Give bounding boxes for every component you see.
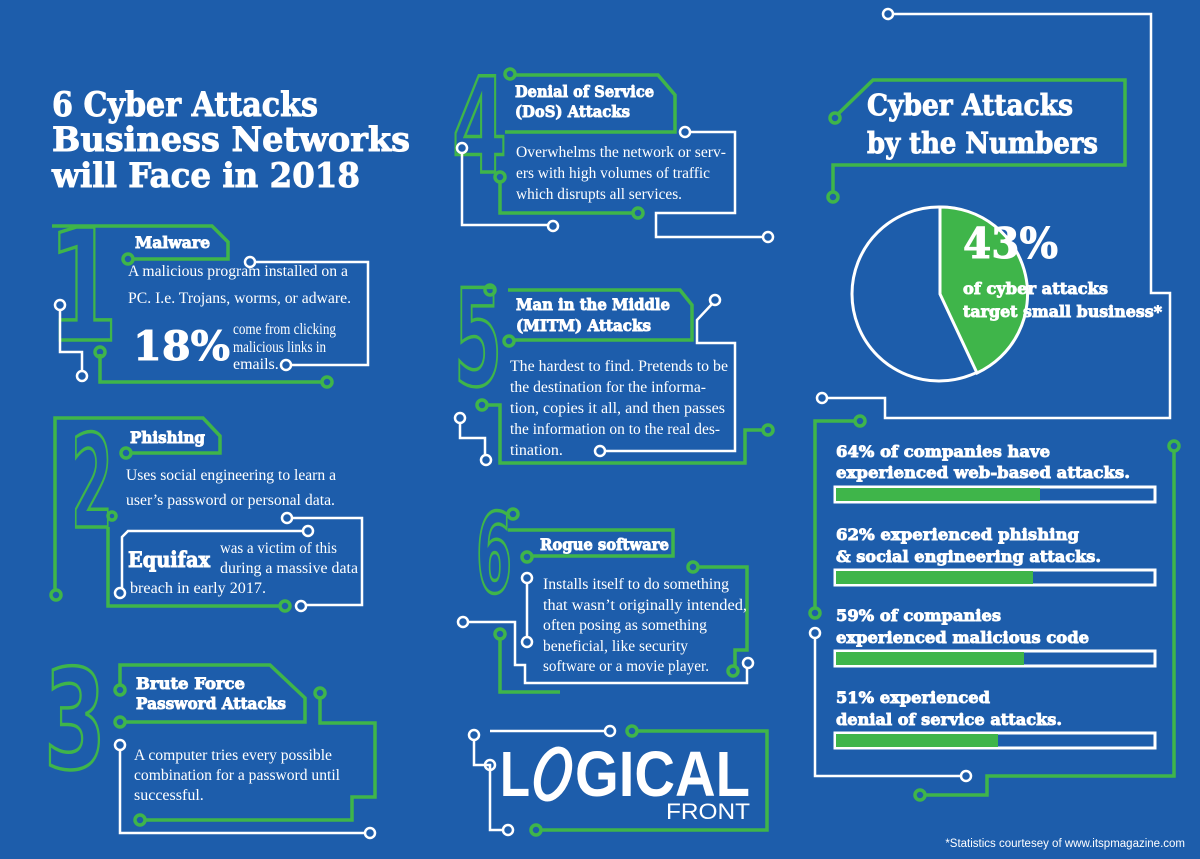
bar 51%: denial of service attacks. <box>836 710 1062 729</box>
title: Business Networks <box>52 120 410 160</box>
bar 62%: & social engineering attacks. <box>836 547 1101 566</box>
panel: 5 MITM <box>454 261 773 465</box>
panel: 1 malware: PC. I.e. Trojans, worms, or adware. <box>128 290 351 307</box>
panel: 5 MITM: the destination for the informa- <box>510 379 706 396</box>
bar 59%: experienced malicious code <box>836 628 1089 647</box>
title <box>51 85 410 196</box>
bar 51%: 51% experienced <box>836 688 990 707</box>
icon: digit 1: 1 <box>48 196 118 377</box>
panel: 2 phishing: during a massive data <box>220 560 358 577</box>
panel: 4 DoS: Denial of Service <box>515 82 654 101</box>
footer: source note: *Statistics courtesey of www.itspmagazine.com <box>945 838 1185 850</box>
panel: 3 brute force: combination for a password until <box>134 767 341 784</box>
panel: 2 phishing <box>51 409 362 611</box>
bar 51% <box>835 688 1155 748</box>
panel: 1 malware: Malware <box>135 233 210 252</box>
panel: cyber attacks by the numbers <box>817 9 1170 418</box>
panel: stats bars <box>810 416 1179 800</box>
panel: 4 DoS <box>452 50 773 242</box>
panel: 5 MITM: Man in the Middle <box>516 295 670 314</box>
heading: by the numbers: Cyber Attacks <box>867 88 1073 122</box>
title: will Face in 2018 <box>51 156 360 196</box>
panel: 2 phishing: user’s password or personal data. <box>126 492 335 509</box>
panel: 2 phishing: Equifax <box>128 547 210 572</box>
panel: 1 malware: malicious links in <box>233 339 326 356</box>
panel: 3 brute force: A computer tries every possible <box>134 747 332 764</box>
panel: 2 phishing: 2 <box>71 409 113 558</box>
bar 64%: experienced web-based attacks. <box>836 463 1130 482</box>
panel: 3 brute force <box>44 640 375 838</box>
panel: 6 rogue software: software or a movie player. <box>543 658 709 675</box>
bar 62% <box>835 525 1155 585</box>
panel: 5 MITM: tination. <box>510 442 563 459</box>
bar 59%: 59% of companies <box>836 606 1001 625</box>
pie chart 43% <box>852 207 1163 381</box>
panel: 4 DoS: (DoS) Attacks <box>515 102 630 121</box>
logo: logical front: L <box>500 738 530 810</box>
panel: 1 malware: emails. <box>233 356 279 373</box>
panel: 6 rogue software: that wasn’t originally intended, <box>543 597 747 614</box>
panel: 4 DoS: ers with high volumes of traffic <box>516 165 710 182</box>
bar 64% <box>835 442 1155 502</box>
panel: 6 rogue software: Rogue software <box>540 535 669 554</box>
panel: 4 DoS: Overwhelms the network or serv- <box>516 144 726 161</box>
panel: 1 malware: come from clicking <box>233 321 336 338</box>
logo: logical front <box>469 726 767 835</box>
panel: 1 malware: A malicious program installed on a <box>128 263 348 280</box>
panel: 6 rogue software: beneficial, like security <box>543 638 688 655</box>
icon: digit 5: 5 <box>454 261 502 417</box>
panel: 4 DoS: which disrupts all services. <box>516 186 682 203</box>
panel: 6 rogue software: often posing as something <box>543 617 707 634</box>
panel: 5 MITM: The hardest to find. Pretends to be <box>510 358 728 375</box>
icon: digit 4: 4 <box>452 50 507 204</box>
pie chart 43%: 43% <box>963 219 1058 268</box>
title: 6 Cyber Attacks <box>52 85 318 125</box>
pie chart 43%: target small business* <box>963 302 1163 321</box>
heading: by the numbers: by the Numbers <box>867 126 1098 160</box>
panel: 5 MITM: the information on to the real des- <box>510 421 720 438</box>
bar 59% <box>835 606 1155 666</box>
logo: logical front: GICAL <box>575 738 750 810</box>
panel: 3 brute force: Password Attacks <box>136 694 286 713</box>
panel: 1 malware <box>48 196 368 387</box>
panel: 2 phishing: Phishing <box>130 428 205 447</box>
panel: 6 rogue software: Installs itself to do something <box>543 576 729 593</box>
panel: 5 MITM: (MITM) Attacks <box>516 316 651 335</box>
bar 64%: 64% of companies have <box>836 442 1050 461</box>
panel: 2 phishing: breach in early 2017. <box>130 580 266 597</box>
pie chart 43%: of cyber attacks <box>963 279 1108 298</box>
panel: 3 brute force: successful. <box>134 787 204 804</box>
bar 62%: 62% experienced phishing <box>836 525 1079 544</box>
panel: 2 phishing: was a victim of this <box>220 540 337 557</box>
icon: digit 3: 3 <box>44 640 106 801</box>
panel: 6 rogue software: 6 <box>476 490 512 618</box>
panel: 2 phishing: Uses social engineering to learn a <box>126 467 336 484</box>
logo: logical front: FRONT <box>666 799 750 824</box>
panel: 5 MITM: tion, copies it all, and then passes <box>510 400 725 417</box>
panel: 6 rogue software <box>458 490 753 692</box>
heading: by the numbers <box>867 88 1098 160</box>
panel: 1 malware: 18% <box>133 323 230 370</box>
panel: 3 brute force: Brute Force <box>136 674 245 693</box>
